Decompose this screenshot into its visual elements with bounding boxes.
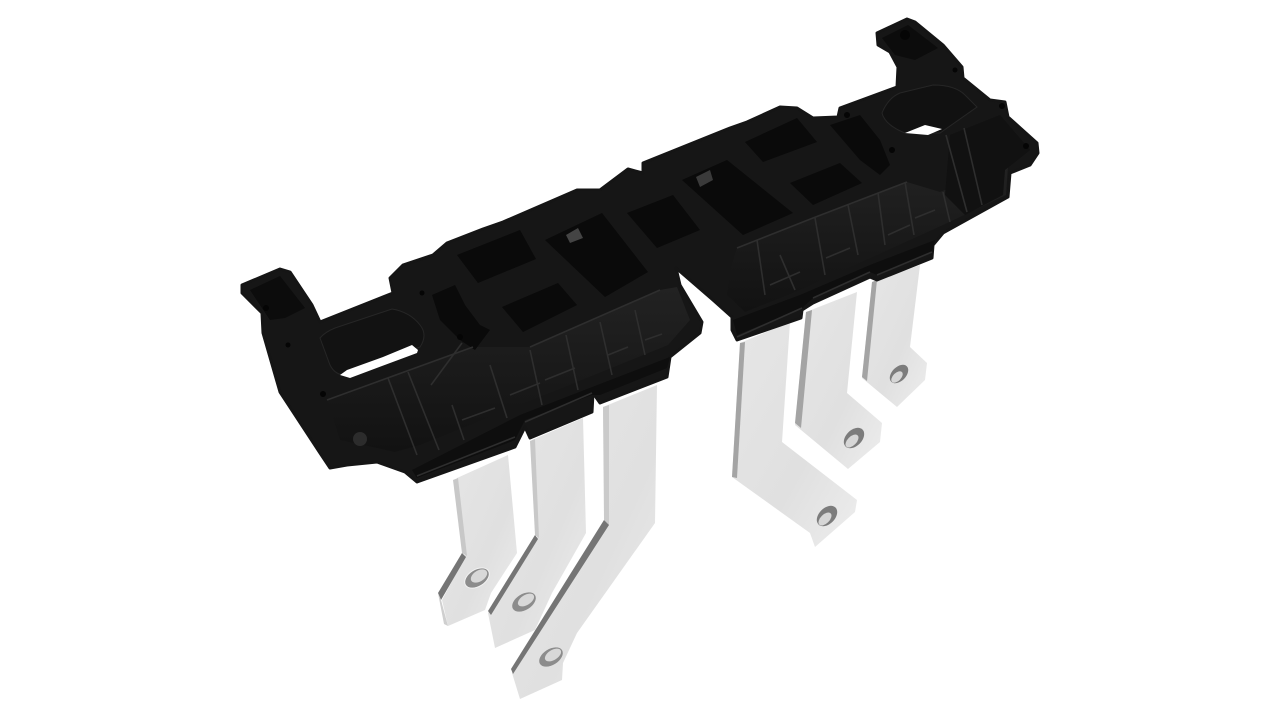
- flange moulded disc: [353, 432, 367, 446]
- left module window: lower: [502, 283, 577, 332]
- left module window: large: [545, 213, 648, 297]
- left module small cavities: [432, 285, 490, 350]
- left boss slot: [340, 345, 418, 378]
- right boss slot: [905, 125, 942, 135]
- body silhouette: [242, 19, 1038, 482]
- metal terminal: left 3: [511, 385, 657, 699]
- right module window: lower: [790, 163, 862, 205]
- left boss opening: [320, 309, 424, 375]
- right module tab: [696, 170, 713, 187]
- left module window: upper left: [457, 230, 536, 283]
- metal terminal: right 3: [862, 265, 927, 407]
- metal terminal: left 1: [438, 455, 517, 626]
- centre cavity cluster: [627, 195, 700, 248]
- left module front wall: [327, 287, 690, 452]
- metal terminal: right 1: [732, 322, 857, 547]
- right boss opening: [882, 85, 977, 133]
- moulded ribs: right module: [737, 128, 982, 337]
- right module window: large: [682, 160, 793, 235]
- metal terminal: right 2: [795, 292, 882, 469]
- right module window: upper: [745, 118, 817, 162]
- left end lug: [250, 276, 305, 320]
- right module front wall: [727, 165, 1008, 312]
- moulded ribs: left module: [327, 290, 662, 476]
- right module small cavities: [830, 115, 890, 175]
- metal terminal: left 2: [488, 418, 586, 648]
- right end wall: [945, 115, 1030, 215]
- right end lug: [882, 25, 938, 60]
- black bracket body: [242, 19, 1038, 482]
- right module flange: [733, 240, 935, 335]
- left module tab: [566, 228, 583, 243]
- left module flange: [412, 357, 670, 478]
- body screw bosses: [263, 30, 1029, 397]
